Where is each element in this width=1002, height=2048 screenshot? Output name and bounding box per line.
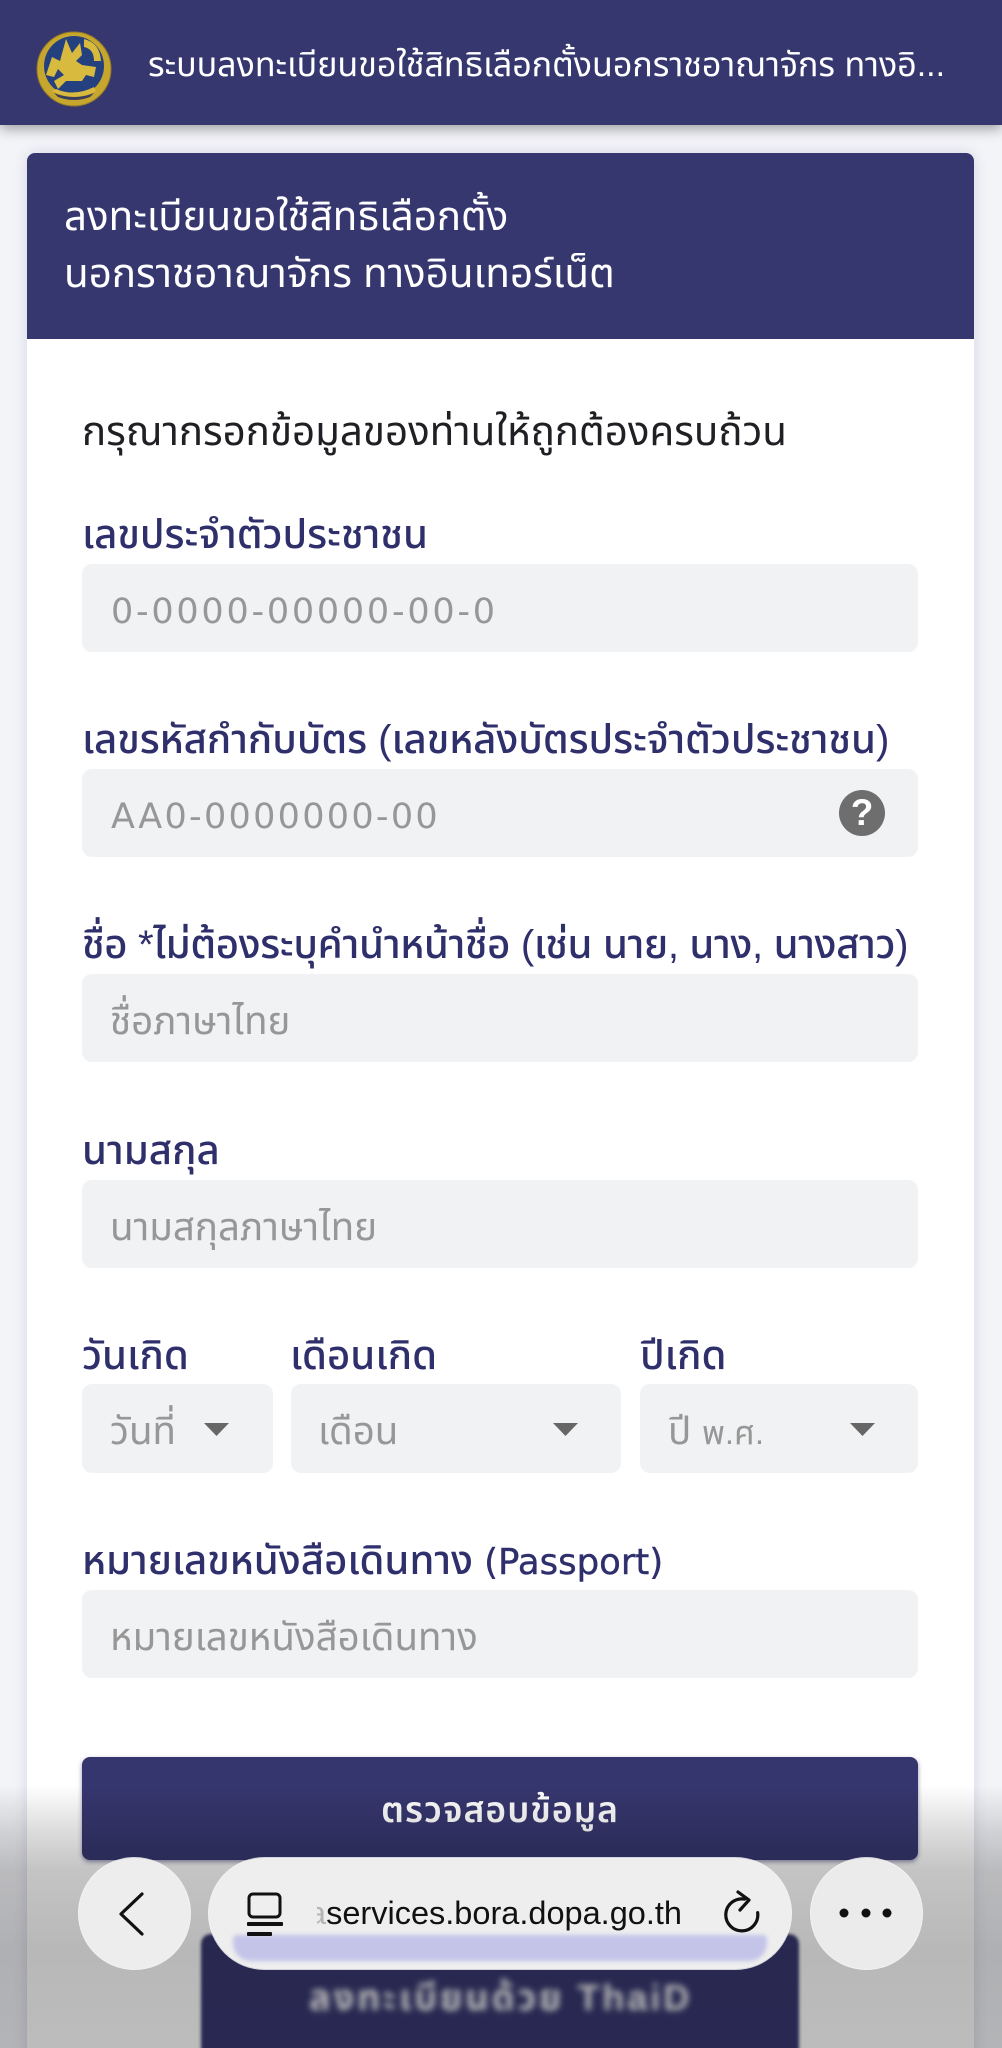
select: month <box>291 1384 621 1473</box>
icon: day caret <box>204 1423 229 1436</box>
field label: national ID: เลขประจำตัวประชาชน <box>82 512 428 557</box>
field: surname input <box>82 1180 918 1268</box>
placeholder: laser code: AA0-0000000-00 <box>111 797 440 837</box>
icon: help <box>839 790 885 836</box>
lavender reflection <box>233 1935 767 1961</box>
icon: government seal <box>36 32 112 106</box>
blurred ThaiD button <box>201 1934 799 2048</box>
field: laser code input <box>82 769 918 857</box>
browser more button <box>811 1858 922 1969</box>
placeholder: surname: นามสกุลภาษาไทย <box>110 1206 377 1249</box>
form instruction: กรุณากรอกข้อมูลของท่านให้ถูกต้องครบถ้วน <box>82 409 787 454</box>
browser address pill <box>209 1858 791 1969</box>
bottom fade overlay <box>0 1785 1002 2048</box>
app bar title: ระบบลงทะเบียนขอใช้สิทธิเลือกตั้งนอกราชอาณาจักร ทางอิ... <box>148 46 945 84</box>
field label: card laser code: เลขรหัสกำกับบัตร (เลขหลังบัตรประจำตัวประชาชน) <box>82 717 889 762</box>
blurred button label: ลงทะเบียนด้วย ThaiD <box>309 1977 692 2018</box>
field label: birth month: เดือนเกิด <box>290 1333 437 1378</box>
field label: passport: หมายเลขหนังสือเดินทาง (Passport) <box>82 1538 663 1583</box>
top app bar <box>0 0 1002 125</box>
url text: aservices.bora.dopa.go.th <box>317 1895 682 1931</box>
icon: reload <box>724 1890 760 1932</box>
field label: birth day: วันเกิด <box>82 1333 189 1378</box>
icon: year caret <box>850 1423 875 1436</box>
button label: ตรวจสอบข้อมูล <box>381 1790 619 1830</box>
select: day <box>82 1384 273 1473</box>
card heading band <box>27 153 974 339</box>
placeholder: first name: ชื่อภาษาไทย <box>110 1000 290 1043</box>
icon: month caret <box>553 1423 578 1436</box>
field: national ID input <box>82 564 918 652</box>
field label: surname: นามสกุล <box>82 1128 220 1173</box>
icon: help: ? <box>851 792 873 833</box>
placeholder: passport: หมายเลขหนังสือเดินทาง <box>110 1616 478 1659</box>
placeholder: year: ปี พ.ศ. <box>668 1410 764 1453</box>
select: year <box>640 1384 918 1473</box>
placeholder: day: วันที่ <box>110 1410 176 1453</box>
icon: more dots <box>840 1908 892 1918</box>
card heading text line 1: ลงทะเบียนขอใช้สิทธิเลือกตั้ง <box>64 194 508 239</box>
field label: first name: ชื่อ *ไม่ต้องระบุคำนำหน้าชื่อ (เช่น นาย, นาง, นางสาว) <box>82 922 908 967</box>
icon: tab view <box>247 1892 283 1936</box>
browser back button <box>79 1858 190 1969</box>
field: first name input <box>82 974 918 1062</box>
field label: birth year: ปีเกิด <box>640 1333 726 1378</box>
field: passport input <box>82 1590 918 1678</box>
placeholder: month: เดือน <box>318 1410 398 1453</box>
check data button <box>82 1757 918 1860</box>
card heading text line 2: นอกราชอาณาจักร ทางอินเทอร์เน็ต <box>64 251 615 296</box>
placeholder: national ID: 0-0000-00000-00-0 <box>111 592 498 632</box>
icon: back chevron <box>119 1892 144 1936</box>
